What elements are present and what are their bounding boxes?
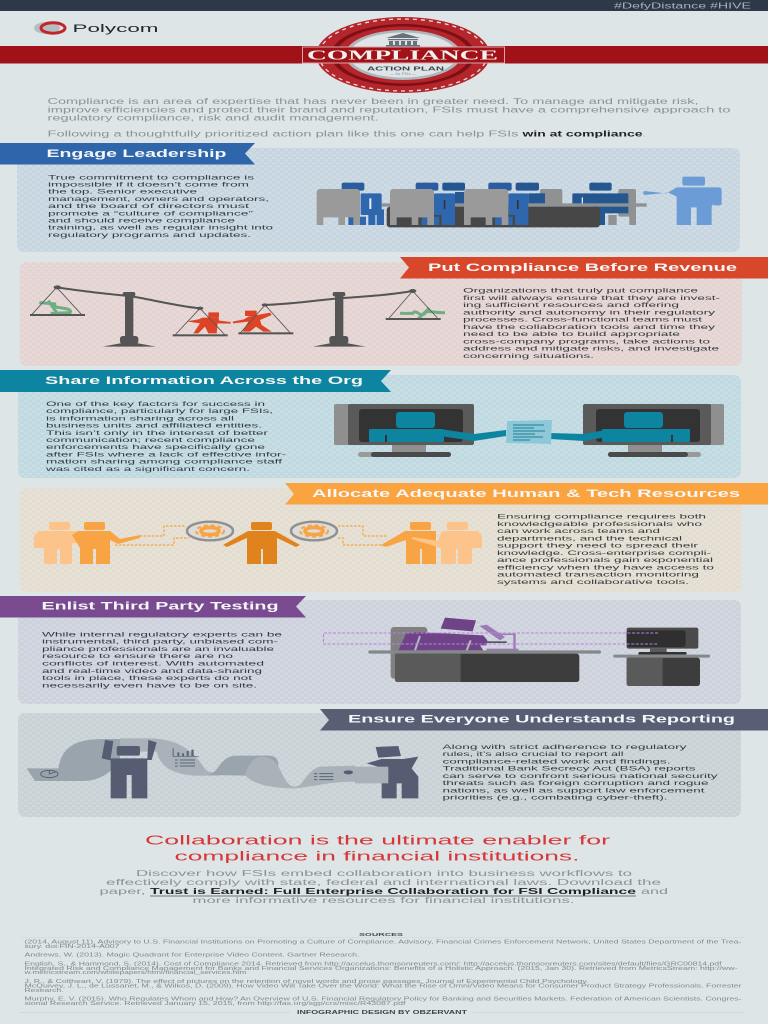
sources: SOURCES: [359, 932, 404, 938]
heading: put compliance before revenue: [400, 257, 768, 278]
design credit: INFOGRAPHIC DESIGN BY OBZERVANT: [297, 1010, 467, 1016]
closing headline: Collaboration is the ultimate enabler for: [145, 834, 610, 848]
sources: J. R., & Coltheart, V. (1979). The effect of pictures on the retention of novel words and prose passages. Journal of Experimental Child Psychology.: [24, 979, 588, 985]
body text: put compliance before revenue: Organizations that truly put compliance: [463, 288, 699, 295]
compliance badge: — for FSIs —: [390, 72, 417, 76]
body text: share information: enforcements have specifically gone: [46, 444, 266, 451]
body text: third party testing: necessarily even have to be on site.: [42, 682, 257, 689]
body text: third party testing: conflicts of interest. With automated: [42, 660, 265, 668]
body text: engage leadership: True commitment to compliance is: [48, 174, 255, 181]
sources: Murphy, E. V. (2015). Who Regulates Whom and How? An Overview of U.S. Financial Regulatory Policy for Banking and Securities Markets. Federation of American Scientists. Congres-: [24, 996, 742, 1002]
closing paragraph: more informative resources for financial institutions.: [192, 896, 574, 905]
icon: bank building: [386, 33, 420, 46]
figure: man holding report: [102, 740, 157, 798]
body text: put compliance before revenue: [463, 288, 720, 360]
figures: left pair: [34, 522, 140, 564]
icon: dollar left: [39, 301, 70, 315]
body text: put compliance before revenue: first will always ensure that they are invest-: [463, 295, 720, 302]
closing paragraph: effectively comply with state, federal and international laws. Download the: [106, 878, 661, 887]
heading: reporting: [320, 709, 768, 730]
body text: engage leadership: training, as well as regular insight into: [48, 225, 274, 232]
body text: third party testing: and real-time video and data-sharing: [42, 668, 263, 675]
far side chairs: [540, 189, 636, 225]
body text: engage leadership: management, owners and operators,: [48, 196, 269, 203]
report sheet: [355, 767, 388, 783]
body text: share information: communication; recent compliance: [46, 437, 256, 444]
panel: engage leadership: [0, 143, 740, 252]
icon: list two: [314, 774, 333, 780]
body text: reporting: Traditional Bank Secrecy Act (BSA) reports: [442, 766, 697, 773]
body text: share information: is information sharing across all: [46, 415, 235, 422]
panel: put compliance before revenue: [20, 257, 768, 366]
dashed connection: [324, 633, 658, 644]
body text: allocate resources: Ensuring compliance requires both: [497, 514, 707, 521]
body text: engage leadership: [48, 174, 274, 239]
closing headline: compliance in financial institutions.: [174, 850, 580, 864]
body text: reporting: Along with strict adherence to regulatory: [442, 744, 688, 751]
body text: engage leadership: promote a “culture of compliance”: [48, 210, 253, 217]
heading: allocate resources: Allocate Adequate Human & Tech Resources: [312, 488, 740, 500]
body text: allocate resources: systems and collaborative tools.: [497, 579, 689, 586]
body text: put compliance before revenue: ing sufficient resources and offering: [463, 302, 680, 309]
illustration: report ribbon and two figures: [27, 738, 418, 798]
intro text: .: [643, 130, 645, 139]
icon: dollar right: [400, 308, 445, 319]
near person three: [488, 183, 528, 225]
body text: share information: after FSIs where a lack of effective infor-: [46, 451, 286, 458]
heading: put compliance before revenue: Put Compliance Before Revenue: [428, 262, 737, 274]
figure: centre person: [223, 522, 300, 564]
panel: share information: [0, 370, 741, 478]
body text: share information: [44, 401, 286, 473]
body text: third party testing: resource to ensure there are no: [42, 653, 234, 660]
figures: handshake: [187, 311, 272, 333]
sources: Andrews, W. (2013). Magic Quadrant for Enterprise Video Content. Gartner Research.: [24, 952, 360, 958]
heading: share information: [0, 370, 391, 392]
body text: allocate resources: efficiency when they have access to: [497, 564, 715, 571]
body text: engage leadership: impossible if it doesn’t come from: [48, 182, 250, 188]
panel: reporting: [18, 709, 768, 817]
heading: allocate resources: [285, 483, 768, 504]
body text: share information: compliance, particularly for large FSIs,: [46, 408, 273, 415]
compliance title: [302, 47, 504, 63]
body text: reporting: compliance-related work and findings.: [442, 758, 671, 766]
illustration: right monitor: [550, 404, 724, 457]
body text: put compliance before revenue: need to be able to build appropriate: [463, 331, 681, 338]
body text: reporting: can serve to confront serious national security: [442, 773, 719, 780]
illustration: connected people and gears: [34, 522, 482, 564]
body text: put compliance before revenue: authority and autonomy in their regulatory: [463, 309, 716, 316]
heading: third party testing: Enlist Third Party Testing: [42, 600, 278, 612]
top hashtag bar: [0, 0, 768, 11]
body text: engage leadership: the top. Senior executive: [48, 189, 198, 196]
sources: (2014, August 11). Advisory to U.S. Financial Institutions on Promoting a Culture of Compliance. Advisory, Financial Crimes Enforcement Network, United States Department of the Trea-: [24, 939, 742, 945]
icon: microscope: [479, 625, 518, 651]
body text: reporting: threats such as foreign corruption and rogue: [442, 780, 709, 787]
icon: pie chart: [41, 770, 58, 778]
body text: share information: business units and affiliated entities.: [46, 423, 262, 430]
body text: allocate resources: departments, and the technical: [497, 535, 683, 542]
heading: engage leadership: [0, 143, 255, 164]
monitor and desk: [613, 628, 710, 686]
closing headline: [145, 834, 610, 864]
intro text: Following a thoughtfully prioritized action plan like this one can help FSIs: [48, 130, 519, 139]
ribbon: [27, 738, 355, 788]
panel: allocate resources: [20, 483, 768, 592]
body text: put compliance before revenue: cross-company programs, take actions to: [463, 338, 711, 345]
body text: put compliance before revenue: concerning situations.: [463, 353, 594, 360]
body text: put compliance before revenue: address and mitigate risks, and investigate: [463, 346, 720, 353]
illustration: balance scales: [30, 285, 445, 347]
compliance title: COMPLIANCE: [307, 48, 498, 62]
near person two: [416, 183, 455, 225]
closing paragraph: [100, 869, 668, 905]
compliance badge: ACTION PLAN: [367, 66, 444, 72]
intro text: improve efficiencies and protect their brand and reputation, FSIs must have a comprehensive approach to: [48, 105, 732, 114]
far side people: [442, 183, 628, 225]
illustration: boardroom meeting: [317, 177, 722, 227]
body text: third party testing: pliance professionals are an invaluable: [42, 646, 275, 653]
body text: allocate resources: support they need to spread their: [497, 543, 700, 550]
near person one: [342, 183, 384, 225]
body text: share information: mation sharing among compliance staff: [46, 459, 282, 466]
body text: engage leadership: and should receive compliance: [48, 218, 236, 224]
illustration: remote tester at desk: [368, 618, 710, 686]
body text: allocate resources: knowledge. Cross-enterprise compli-: [497, 550, 711, 557]
body text: allocate resources: automated transaction monitoring: [497, 572, 700, 579]
closing paragraph: Discover how FSIs embed collaboration into business workflows to: [136, 869, 633, 878]
body text: reporting: [442, 744, 719, 802]
Polycom logo: [34, 22, 158, 35]
body text: reporting: nations, as well as support law enforcement: [442, 787, 705, 794]
body text: share information: This isn’t only in the interest of better: [46, 430, 270, 437]
panel: third party testing: [0, 596, 741, 704]
icon: list one: [175, 760, 195, 766]
heading: third party testing: [0, 596, 306, 618]
sources: Integrated Risk and Compliance Management for Banks and Financial Services Organizations: Benefits of a Holistic Approach. (2015, Jan 30). Retrieved from MetricsStream: http://ww-: [24, 966, 738, 972]
sources: sury. doi:FIN-2014-A007: [24, 944, 120, 950]
body text: third party testing: While internal regulatory experts can be: [42, 631, 283, 638]
sources: [20, 932, 745, 1007]
body text: allocate resources: [497, 514, 715, 586]
body text: allocate resources: can work across teams and: [497, 528, 661, 535]
compliance badge: [302, 17, 504, 93]
figure: presenter: [643, 177, 722, 225]
heading: engage leadership: Engage Leadership: [46, 148, 227, 160]
body text: reporting: rules, it’s also crucial to report all: [442, 751, 624, 758]
sources: sional Research Service. Retrieved January 15, 2015, from http://fas.org/sgp/crs/misc/R43087.pdf: [24, 1001, 407, 1007]
body text: third party testing: [42, 631, 283, 689]
heading: share information: Share Information Across the Org: [45, 375, 363, 387]
body text: put compliance before revenue: processes. Cross-functional teams must: [463, 317, 702, 324]
icon: gear right: [291, 522, 337, 540]
Polycom logo: Polycom: [72, 23, 158, 35]
body text: reporting: priorities (e.g., combating cyber-theft).: [442, 795, 668, 802]
heading: reporting: Ensure Everyone Understands Reporting: [348, 714, 735, 726]
body text: third party testing: instrumental, third party, unbiased com-: [42, 639, 278, 646]
body text: put compliance before revenue: have the collaboration tools and time they: [463, 324, 716, 331]
closing paragraph: Trust is Earned: Full Enterprise Collaboration for FSI Compliance: [150, 887, 637, 896]
figure: man reading: [367, 746, 418, 798]
red header band: [0, 46, 768, 64]
figures: right pair: [381, 522, 482, 564]
near chairs: [317, 189, 508, 225]
sources: English, S., & Hammond, S. (2014). Cost of Compliance 2014. Retrieved from http://accelus.thomsonreuters.com/: http://accelus.thomsonreuters.com/sites/default/files/GRC00814.pdf: [24, 961, 723, 967]
closing paragraph: and: [641, 887, 668, 896]
sources: McQuivey, J. L., de Lussanet, M., & Wilkos, D. (2009). How Video Will Take Over the World: What the Rise of Omni/Video Means for Consumer Product Strategy Professionals. Forrester: [24, 983, 742, 989]
intro text: Compliance is an area of expertise that has never been in greater need. To manage and mitigate risk,: [48, 97, 698, 106]
icon: gear left: [187, 522, 233, 540]
body text: share information: One of the key factors for success in: [46, 401, 266, 408]
figure: tester: [398, 618, 487, 650]
closing paragraph: paper,: [100, 887, 146, 896]
body text: engage leadership: and the board of directors must: [48, 203, 249, 210]
body text: engage leadership: regulatory programs and updates.: [48, 232, 251, 239]
intro text: win at compliance: [521, 130, 644, 139]
sources: Research.: [24, 988, 64, 994]
body text: allocate resources: knowledgeable professionals who: [497, 521, 703, 528]
icon: shared document: [506, 420, 552, 444]
top hashtag bar: #DefyDistance #HIVE: [614, 2, 751, 11]
body text: allocate resources: ance professionals gain exponential: [497, 557, 714, 564]
table: [382, 203, 647, 227]
body text: third party testing: tools in place, these experts do not: [42, 675, 252, 682]
icon: bar chart: [173, 748, 199, 757]
sources: w.metricstream.com/whitepapers/html/financial_services.htm: [24, 970, 246, 976]
body text: share information: was cited as a significant concern.: [44, 466, 250, 473]
illustration: left monitor: [334, 404, 506, 457]
intro text: regulatory compliance, risk and audit management.: [48, 113, 378, 122]
intro text: [48, 97, 732, 139]
